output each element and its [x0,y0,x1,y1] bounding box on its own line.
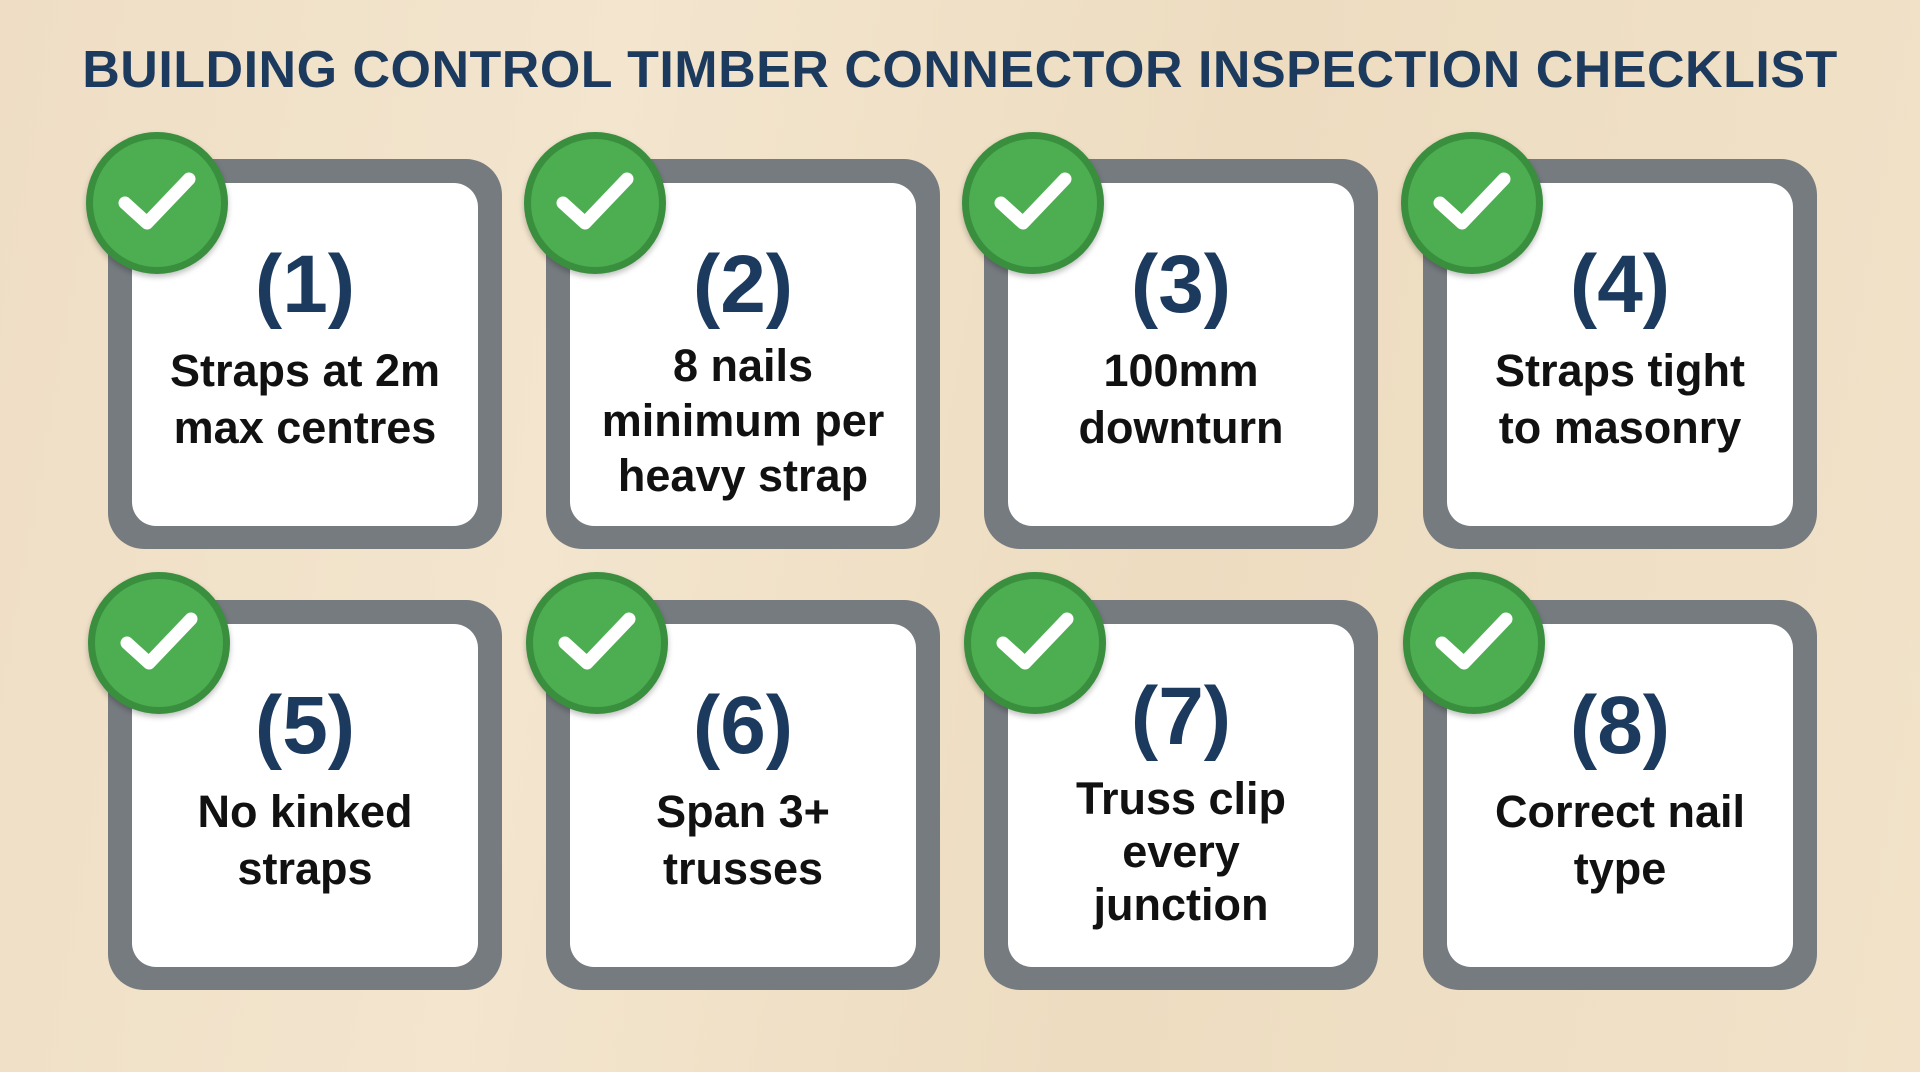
icon: check 2 [524,132,666,274]
card 7: junction [1094,879,1268,930]
card 5: (5) [255,680,355,771]
card 2: (2) [693,239,793,330]
title: BUILDING CONTROL TIMBER CONNECTOR INSPECTION CHECKLIST [82,41,1838,99]
card 7: Truss clip [1076,773,1286,824]
icon: check 7 [964,572,1106,714]
icon: check 8 [1403,572,1545,714]
card 5: No kinked [197,786,413,837]
card 8: type [1574,843,1666,894]
card 8: (8) [1570,680,1670,771]
card 7: every [1122,826,1240,877]
card 4: Straps tight [1495,345,1745,396]
card 4: to masonry [1499,402,1741,453]
icon: check 3 [962,132,1104,274]
card 2 [546,159,940,549]
card 1: max centres [174,402,436,453]
card 5 [108,600,502,990]
card 7 [984,600,1378,990]
card 1: (1) [255,239,355,330]
card 6: (6) [693,680,793,771]
card 6: Span 3+ [656,786,830,837]
card 8: Correct nail [1495,786,1745,837]
card 2: heavy strap [618,450,868,501]
card 5: straps [237,843,373,894]
card 3 [984,159,1378,549]
icon: check 4 [1401,132,1543,274]
card 3: downturn [1079,402,1283,453]
card 4: (4) [1570,239,1670,330]
card 8 [1423,600,1817,990]
card 6 [546,600,940,990]
card 3: (3) [1131,239,1231,330]
card 1 [108,159,502,549]
card 4 [1423,159,1817,549]
card 2: minimum per [602,395,884,446]
card 6: trusses [663,843,823,894]
card 7: (7) [1131,671,1231,762]
icon: check 6 [526,572,668,714]
card 3: 100mm [1103,345,1259,396]
card 2: 8 nails [673,340,813,391]
icon: check 5 [88,572,230,714]
icon: check 1 [86,132,228,274]
card 1: Straps at 2m [170,345,440,396]
